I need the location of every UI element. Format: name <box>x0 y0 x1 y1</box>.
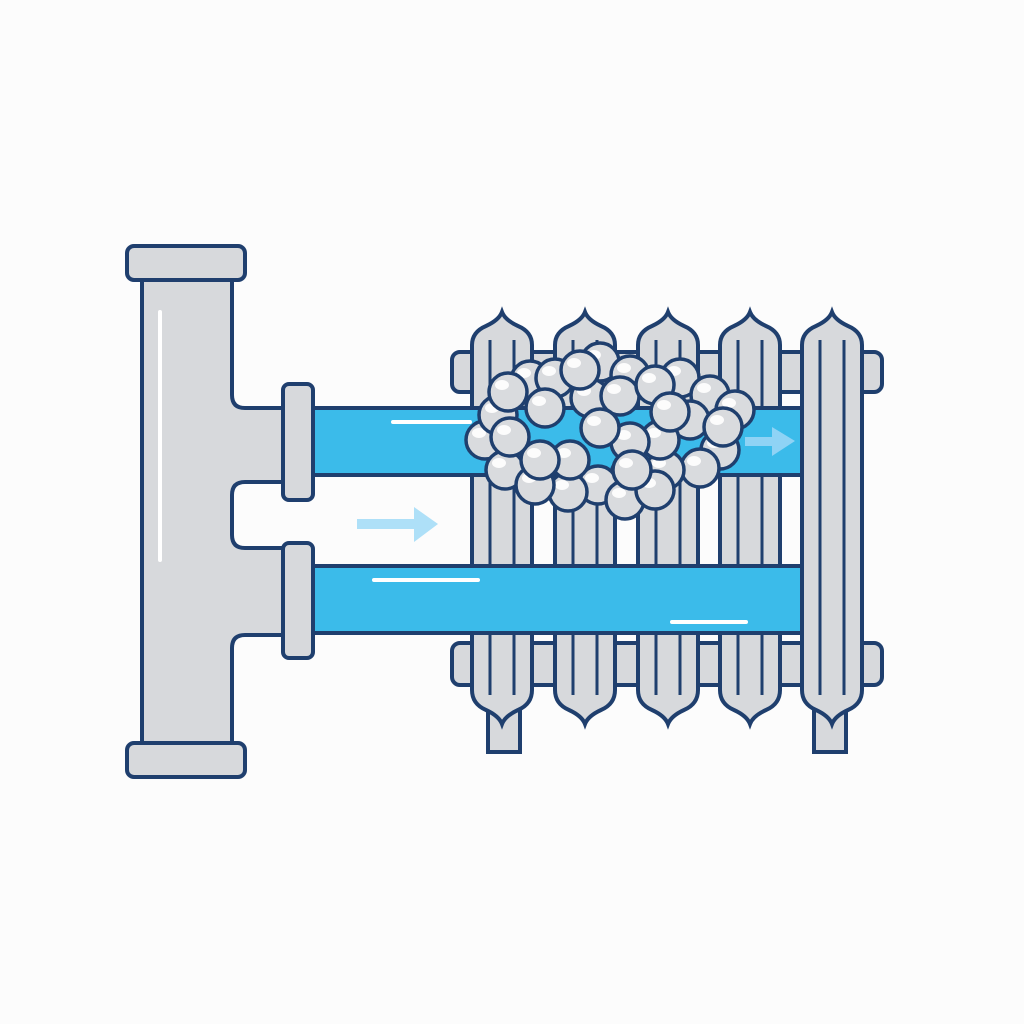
radiator legs <box>488 700 846 752</box>
lower blue pipe <box>313 566 805 633</box>
radiator last column <box>802 312 862 724</box>
arrow: flow upper right <box>745 427 795 456</box>
bubbles cluster <box>466 343 754 519</box>
radiator top bar <box>452 352 882 392</box>
radiator bottom bar <box>452 643 882 685</box>
upper blue pipe <box>313 408 805 475</box>
radiator <box>452 312 882 752</box>
T pipe <box>127 246 313 777</box>
radiator columns <box>472 312 780 724</box>
arrow: flow middle <box>357 507 438 542</box>
